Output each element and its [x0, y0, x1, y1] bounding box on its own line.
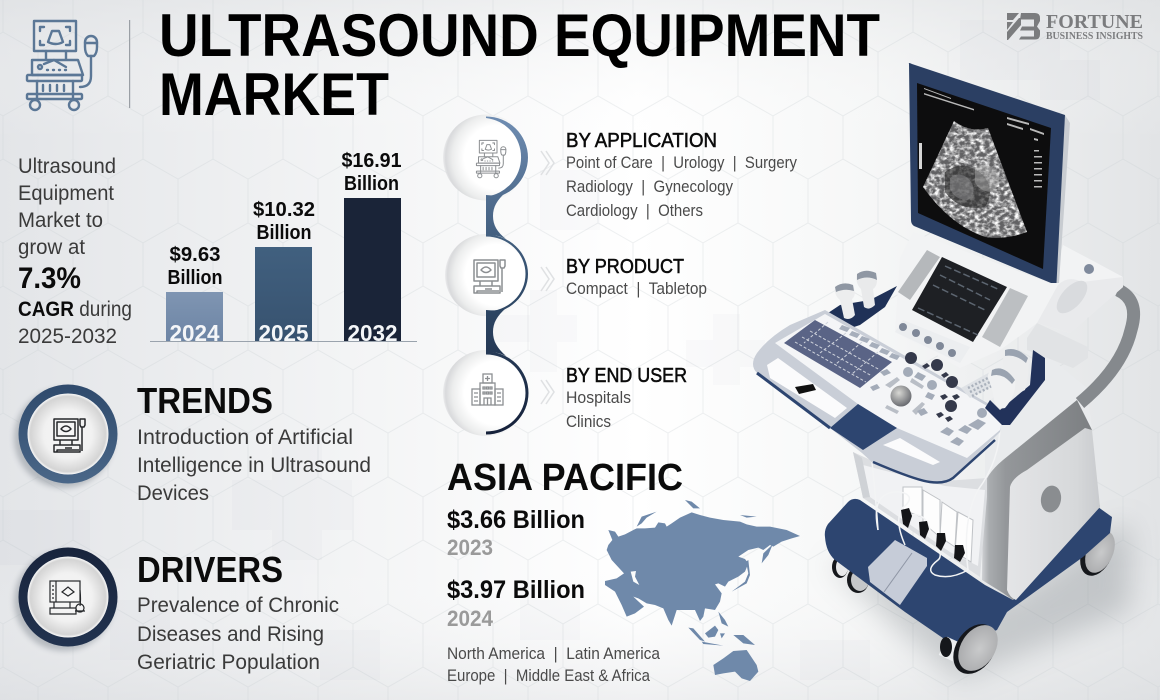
- button strip: [839, 325, 900, 360]
- icon: ultrasound machine (header): [27, 21, 97, 110]
- icon: drivers badge: [14, 548, 118, 651]
- panel: trends: [14, 380, 371, 505]
- text: other regions: [447, 645, 661, 685]
- illustration: ultrasound machine: [753, 63, 1134, 682]
- value 2024: 2024: [447, 606, 494, 631]
- text block: CAGR summary: 7.3%: [18, 262, 81, 295]
- text block: CAGR summary: Market to: [18, 208, 103, 232]
- connector arcs: [486, 116, 528, 434]
- text block: CAGR summary: [18, 154, 132, 348]
- title: [159, 2, 880, 128]
- bar 2024: [166, 244, 223, 346]
- bar 2025: $10.32: [253, 199, 315, 221]
- text: drivers description: Geriatric Population: [137, 651, 320, 674]
- text: drivers description: [137, 594, 339, 674]
- text: trends description: Devices: [137, 482, 209, 505]
- text: trends description: [137, 426, 371, 505]
- cart side panel: [982, 400, 1100, 600]
- text: drivers description: Prevalence of Chronic: [137, 594, 339, 617]
- panel: drivers: [14, 548, 339, 674]
- logo: Fortune Business Insights: [1007, 11, 1143, 42]
- text: by end user: Clinics: [566, 413, 611, 431]
- title: ULTRASOUND EQUIPMENT: [159, 2, 880, 69]
- text block: CAGR summary: 2025-2032: [18, 324, 117, 348]
- text: drivers description: Diseases and Rising: [137, 623, 324, 646]
- left probe holder: [825, 271, 897, 330]
- front wheel: [939, 616, 1006, 682]
- bar 2032: $16.91: [342, 150, 402, 172]
- chevrons: [541, 151, 554, 404]
- panel: Asia Pacific: [447, 457, 800, 685]
- bar 2024: 2024: [170, 320, 220, 346]
- bar 2024: $9.63: [170, 244, 220, 266]
- text: by end user: Hospitals: [566, 389, 631, 407]
- bar chart: market size: [150, 150, 417, 346]
- text: by product: BY PRODUCT: [566, 255, 684, 278]
- text: by end user: BY END USER: [566, 364, 687, 387]
- value 2024: $3.97 Billion: [447, 576, 585, 604]
- bar 2032: 2032: [348, 320, 398, 346]
- title: MARKET: [159, 61, 389, 128]
- upper shell and cradle: [895, 232, 1123, 368]
- icon: hospital: [472, 374, 503, 405]
- cart top surface: [985, 352, 1092, 490]
- probe compartment: [853, 425, 1000, 577]
- bar 2032: Billion: [344, 173, 399, 195]
- pedal: [868, 540, 927, 605]
- lower console: [753, 310, 1045, 482]
- touch screen: [912, 257, 1007, 342]
- right probe holder: [985, 349, 1045, 425]
- bar 2025: Billion: [256, 222, 312, 244]
- keyboard: [784, 320, 892, 388]
- map: Asia Pacific: [605, 500, 800, 681]
- monitor: [909, 63, 1070, 283]
- bar 2025: 2025: [258, 320, 309, 346]
- text: by application: BY APPLICATION: [566, 129, 717, 152]
- heading: Asia Pacific: ASIA PACIFIC: [447, 457, 683, 499]
- knob plate: [895, 320, 970, 363]
- monitor screen readout: [919, 88, 1044, 188]
- knob row: [899, 323, 956, 357]
- segment circles: [443, 114, 529, 436]
- text: by application: [566, 129, 798, 220]
- value 2023: 2023: [447, 535, 493, 560]
- heading: trends: TRENDS: [137, 380, 273, 421]
- text: trends description: Introduction of Artificial: [137, 426, 353, 449]
- panel: segmentation timeline: [443, 114, 798, 436]
- ultrasound image: [923, 121, 1027, 238]
- text: by application: Cardiology | Others: [566, 202, 703, 220]
- text block: CAGR summary: Ultrasound: [18, 154, 116, 178]
- text: by application: Radiology | Gynecology: [566, 178, 734, 196]
- icon: application: [476, 140, 506, 178]
- bar 2025: [253, 199, 315, 346]
- back wheels: [832, 525, 1121, 593]
- bar 2032: [342, 150, 402, 346]
- floor shadow: [825, 520, 1130, 680]
- text: by end user: [566, 364, 687, 431]
- base: [825, 499, 1112, 645]
- logo: Fortune Business Insights: FORTUNE: [1046, 11, 1143, 33]
- text block: CAGR summary: CAGR during: [18, 298, 132, 321]
- text: other regions: Europe | Middle East & Africa: [447, 667, 651, 685]
- icon: trends badge: [14, 384, 118, 488]
- text: by product: [566, 255, 707, 298]
- icon: product: [474, 260, 505, 293]
- value 2023: [447, 506, 585, 560]
- text: trends description: Intelligence in Ultrasound: [137, 454, 371, 477]
- monitor screen: [917, 83, 1051, 269]
- text block: CAGR summary: grow at: [18, 235, 85, 259]
- value 2024: [447, 576, 585, 631]
- rear arm: [1080, 290, 1134, 403]
- header divider: [129, 20, 130, 108]
- text block: CAGR summary: Equipment: [18, 181, 114, 205]
- text: by product: Compact | Tabletop: [566, 280, 707, 298]
- logo: Fortune Business Insights: BUSINESS INSIGHTS: [1046, 31, 1143, 42]
- bar 2024: Billion: [168, 267, 222, 289]
- text: other regions: North America | Latin America: [447, 645, 661, 663]
- cradle bracket: [1027, 323, 1088, 368]
- trackball and controls: [870, 352, 1000, 446]
- text: by application: Point of Care | Urology | Surgery: [566, 154, 798, 172]
- heading: drivers: DRIVERS: [137, 549, 283, 590]
- value 2023: $3.66 Billion: [447, 506, 585, 534]
